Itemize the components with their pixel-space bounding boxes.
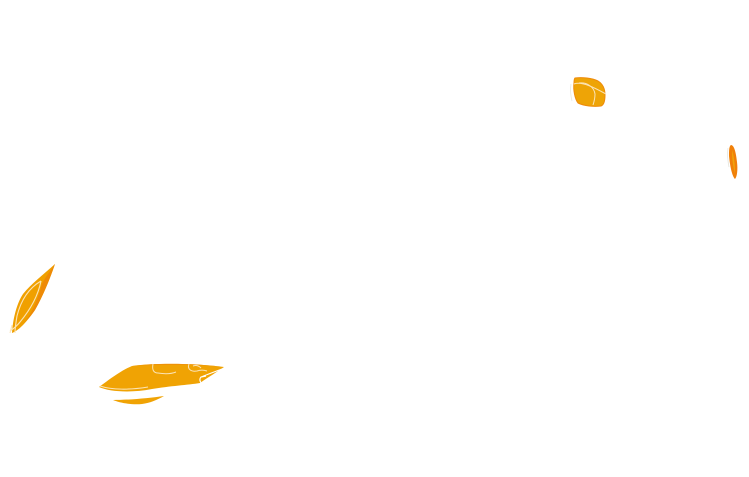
icon: thin sliver right edge [728,145,737,179]
icon: rounded square top right [571,78,606,106]
icon: leaf shape lower left [10,264,55,333]
icon: small swoosh below wide shape [113,396,164,404]
icon: wide swoosh shape bottom left [99,364,224,391]
